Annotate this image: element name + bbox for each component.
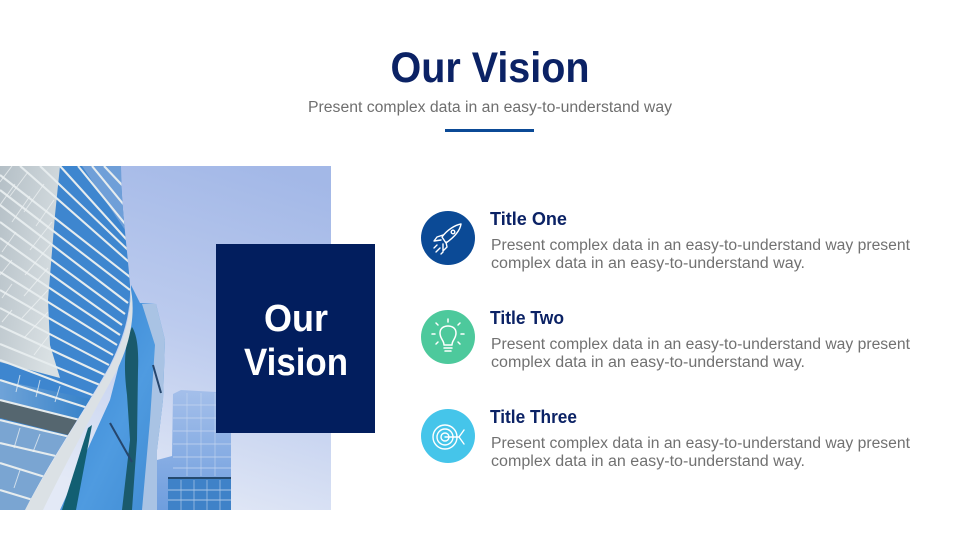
heading: Title Three: Title Three — [490, 406, 577, 427]
title: Our Vision — [390, 44, 590, 92]
heading: Title Two: Title Two — [490, 307, 564, 328]
subtitle: Present complex data in an easy-to-understand way — [308, 99, 672, 116]
body text: Title Three: complex data in an easy-to-understand way. — [491, 453, 805, 470]
middle curved tower — [60, 285, 165, 510]
title underline — [445, 129, 534, 132]
body text: Title Three — [491, 435, 911, 470]
box heading: Our — [264, 298, 328, 340]
photo: skyscrapers against a blue sky — [0, 166, 331, 510]
body text: Title Two — [491, 336, 911, 371]
icon: light bulb — [421, 310, 475, 364]
box heading — [244, 298, 348, 384]
item: Title Two — [421, 307, 911, 371]
body text: Title Two: Present complex data in an easy-to-understand way present — [491, 336, 911, 353]
body text: Title One: Present complex data in an easy-to-understand way present — [491, 237, 911, 254]
body text: Title Two: complex data in an easy-to-understand way. — [491, 354, 805, 371]
distant tower — [157, 390, 231, 510]
icon: target with arrow — [421, 409, 475, 463]
body text: Title One: complex data in an easy-to-understand way. — [491, 255, 805, 272]
icon: rocket — [421, 211, 475, 265]
box heading: Vision — [244, 342, 348, 384]
body text: Title One — [491, 237, 911, 272]
body text: Title Three: Present complex data in an easy-to-understand way present — [491, 435, 911, 452]
panel: Our Vision box — [216, 244, 375, 433]
curved white edge band — [25, 285, 133, 510]
heading: Title One: Title One — [490, 208, 567, 229]
item: Title One — [421, 208, 911, 272]
item: Title Three — [421, 406, 911, 470]
left tower facade — [0, 166, 135, 510]
